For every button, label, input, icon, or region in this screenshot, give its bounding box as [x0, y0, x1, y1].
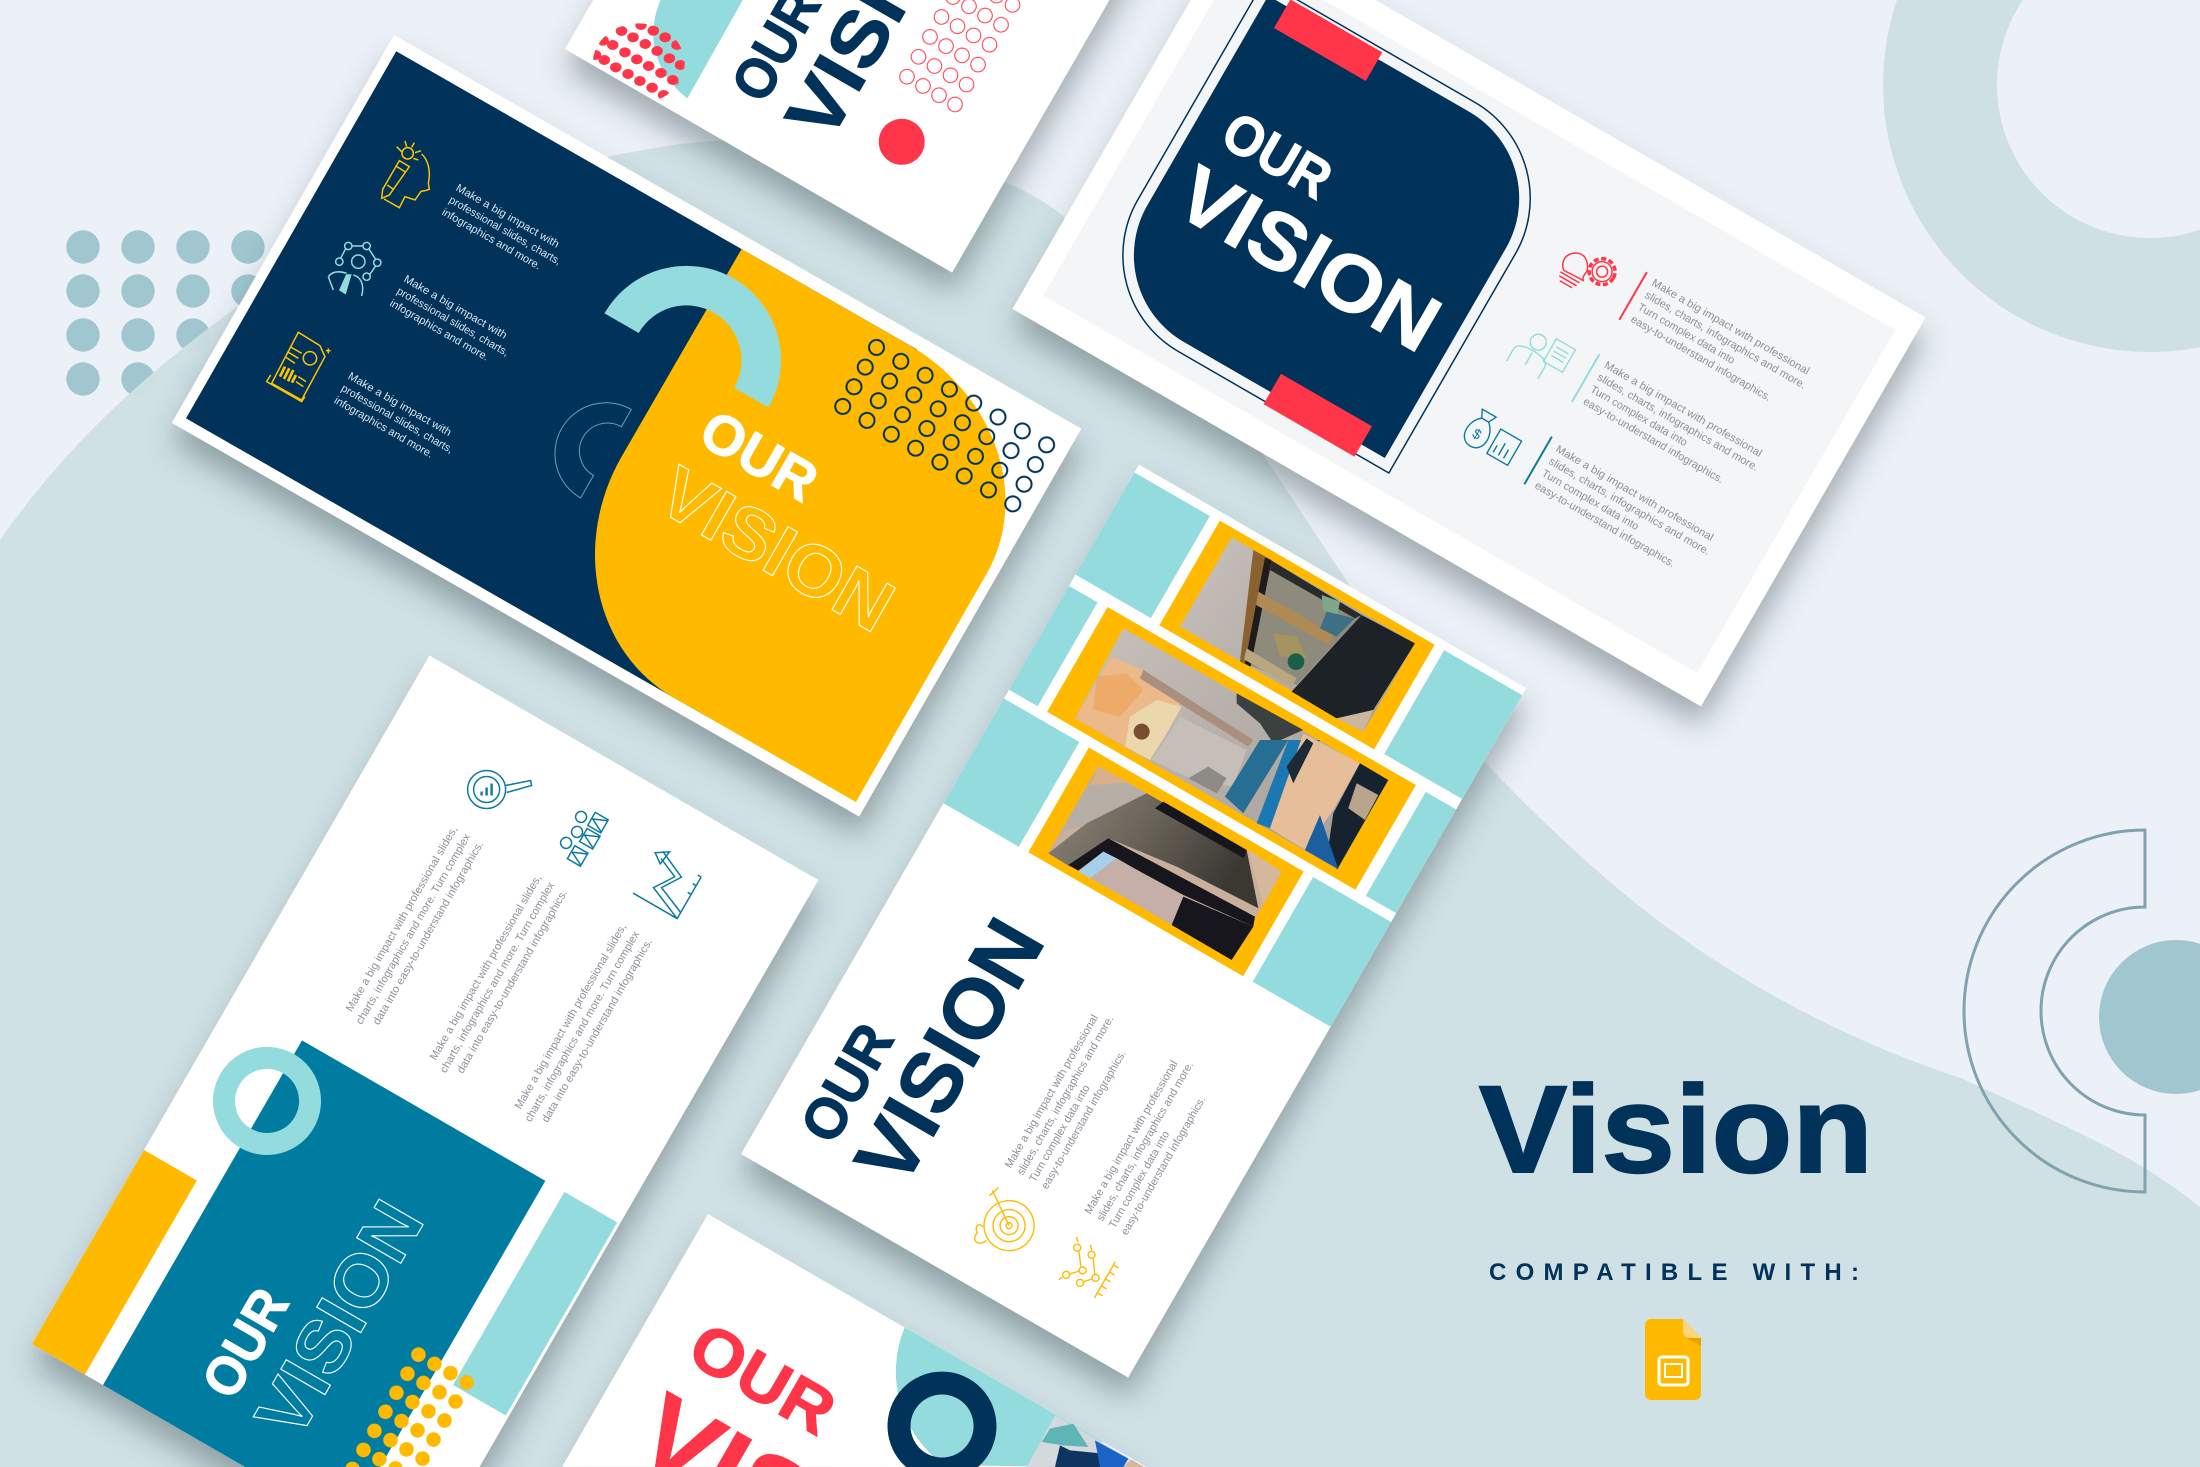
text block 1: slides, charts, infographics and more. [1643, 289, 1808, 392]
text block 3: Make a big impact with [346, 370, 453, 439]
background solid circle [2099, 940, 2200, 1094]
text block 3: Make a big impact with professional [1554, 443, 1715, 544]
text block 2: Turn complex data into [1588, 384, 1689, 449]
text block 1: Make a big impact with professional slides, [344, 824, 460, 1014]
slide: photo collage center [741, 465, 1526, 1377]
compatible with label: COMPATIBLE WITH: [1489, 1259, 1859, 1286]
outlined C shape [536, 384, 631, 498]
text block 1: Turn complex data into [1027, 1083, 1093, 1184]
text block 2: Turn complex data into [1107, 1129, 1172, 1230]
text block 3 [1533, 443, 1719, 582]
slide title: VISION [1162, 148, 1455, 369]
grey panel [1043, 0, 1895, 673]
slide: bottom red partial [562, 1214, 1146, 1467]
slide title OUR: OUR [690, 397, 829, 514]
teal shape and red dots [590, 0, 743, 105]
slide title: VISION [837, 903, 1062, 1200]
text block 2: professional slides, charts, [394, 285, 511, 359]
icon: people and blocks [555, 805, 609, 867]
slide: blue bottom left [32, 656, 818, 1467]
teal bar [453, 1192, 617, 1415]
background ring top right [1883, 0, 2200, 352]
slide: top red partial [554, 0, 1143, 303]
title: Vision [1479, 1061, 1873, 1199]
text block 1: Turn complex data into [1636, 301, 1737, 367]
background dot grid [66, 230, 265, 396]
navy ring grid [825, 331, 1064, 521]
icon: target stopwatch [966, 1185, 1045, 1265]
text block 2 [1083, 1053, 1220, 1237]
navy panel [186, 51, 917, 716]
text block 3: Make a big impact with professional slides, [513, 922, 629, 1111]
text block 3 [332, 370, 462, 468]
text block 1: infographics and more. [440, 206, 543, 272]
text block 2: Make a big impact with professional [1602, 359, 1764, 460]
navy rounded shape [1097, 0, 1556, 458]
icon: money bag and chart: $ [1470, 425, 1485, 443]
photo 2: mural and interior [1075, 628, 1388, 869]
navy ring [887, 1372, 996, 1467]
text block 1: easy-to-understand infographics. [1629, 313, 1773, 404]
background outlined C shape [1964, 830, 2145, 1192]
text block 2: Make a big impact with professional [1083, 1059, 1180, 1216]
teal blocks [944, 472, 1522, 1027]
text block 1: easy-to-understand infographics. [1039, 1049, 1129, 1191]
text block 3: Turn complex data into [1540, 468, 1641, 533]
red ring grid [893, 0, 1038, 119]
text block 2: slides, charts, infographics and more. [1595, 371, 1760, 474]
icon: magnifier chart [468, 771, 532, 809]
blue panel [103, 1040, 545, 1467]
teal ring [208, 1042, 326, 1160]
text block 3: slides, charts, infographics and more. [1547, 456, 1712, 558]
text block 2: easy-to-understand infographics. [1581, 396, 1726, 486]
text block 3: charts, infographics and more. Turn complex [523, 929, 642, 1124]
icon: network line chart [1054, 1237, 1122, 1303]
photos [1048, 537, 1415, 960]
text block 3: infographics and more. [332, 395, 435, 461]
text block 2: Make a big impact with professional slides, [428, 873, 544, 1062]
slide: top right grey [1012, 0, 1925, 706]
yellow shape [530, 249, 1066, 802]
paint photo [1027, 1415, 1144, 1467]
icon: network person [328, 242, 381, 296]
navy rounded shape outline [1082, 0, 1571, 473]
yellow dots [343, 1341, 480, 1467]
icon: report document [267, 332, 331, 402]
text block 3: professional slides, charts, [339, 382, 455, 456]
text block 1: data into easy-to-understand infographics. [371, 839, 486, 1027]
red circle [870, 110, 933, 173]
divider red [1618, 272, 1648, 320]
text block 1: slides, charts, infographics and more. [1015, 1014, 1116, 1177]
text block 1: Make a big impact with professional [1003, 1013, 1101, 1170]
text block 3: easy-to-understand infographics. [1533, 480, 1677, 570]
icon: head and pencil [382, 141, 429, 208]
slide title: OUR [677, 1308, 848, 1449]
text block 1: professional slides, charts, [447, 194, 563, 268]
slide title [619, 1308, 871, 1467]
icon: money bag and chart [1460, 407, 1526, 467]
text block 2: infographics and more. [388, 297, 491, 364]
teal shape [855, 1328, 1103, 1467]
photo 1: gilded window and marble [1180, 537, 1415, 732]
slide title VISION outline: VISION [646, 451, 907, 648]
slide title [1162, 96, 1486, 369]
icon: person and document [1507, 323, 1575, 388]
text block 3: data into easy-to-understand infographics. [540, 937, 655, 1125]
text block 1: Make a big impact with [454, 182, 561, 251]
slide: navy and yellow [172, 35, 1081, 816]
slide title: OUR [1212, 99, 1343, 211]
icon: bulb and gear [1554, 241, 1620, 303]
slide title: OUR [788, 1013, 907, 1153]
text block 1 [1629, 277, 1815, 416]
photo 3: metal surface [1048, 766, 1282, 960]
divider teal [1571, 354, 1600, 403]
text block 2: easy-to-understand infographics. [1119, 1095, 1208, 1237]
text block 2: data into easy-to-understand infographics. [455, 888, 570, 1076]
text block 1 [440, 182, 570, 280]
text block 2 [1581, 359, 1767, 498]
red tab top [1274, 0, 1382, 81]
teal half ring [604, 231, 815, 407]
text block 2 [388, 273, 518, 371]
icon: arrow chart [632, 846, 704, 919]
slide title VISION outline: VISION [239, 1187, 439, 1451]
text block 2: slides, charts, infographics and more. [1095, 1060, 1196, 1223]
slide title OUR: OUR [190, 1278, 301, 1408]
red tab bottom [1263, 374, 1372, 457]
yellow bar [32, 1150, 197, 1374]
divider blue [1523, 436, 1553, 485]
text block 2: Make a big impact with [401, 273, 509, 342]
text block 1: charts, infographics and more. Turn complex [354, 831, 473, 1027]
text block 2: charts, infographics and more. Turn complex [438, 880, 557, 1075]
text block 1: Make a big impact with professional [1650, 277, 1811, 377]
icon: Google Slides [1645, 1319, 1701, 1400]
yellow frames [982, 494, 1481, 1003]
text block 1 [1003, 1007, 1141, 1191]
